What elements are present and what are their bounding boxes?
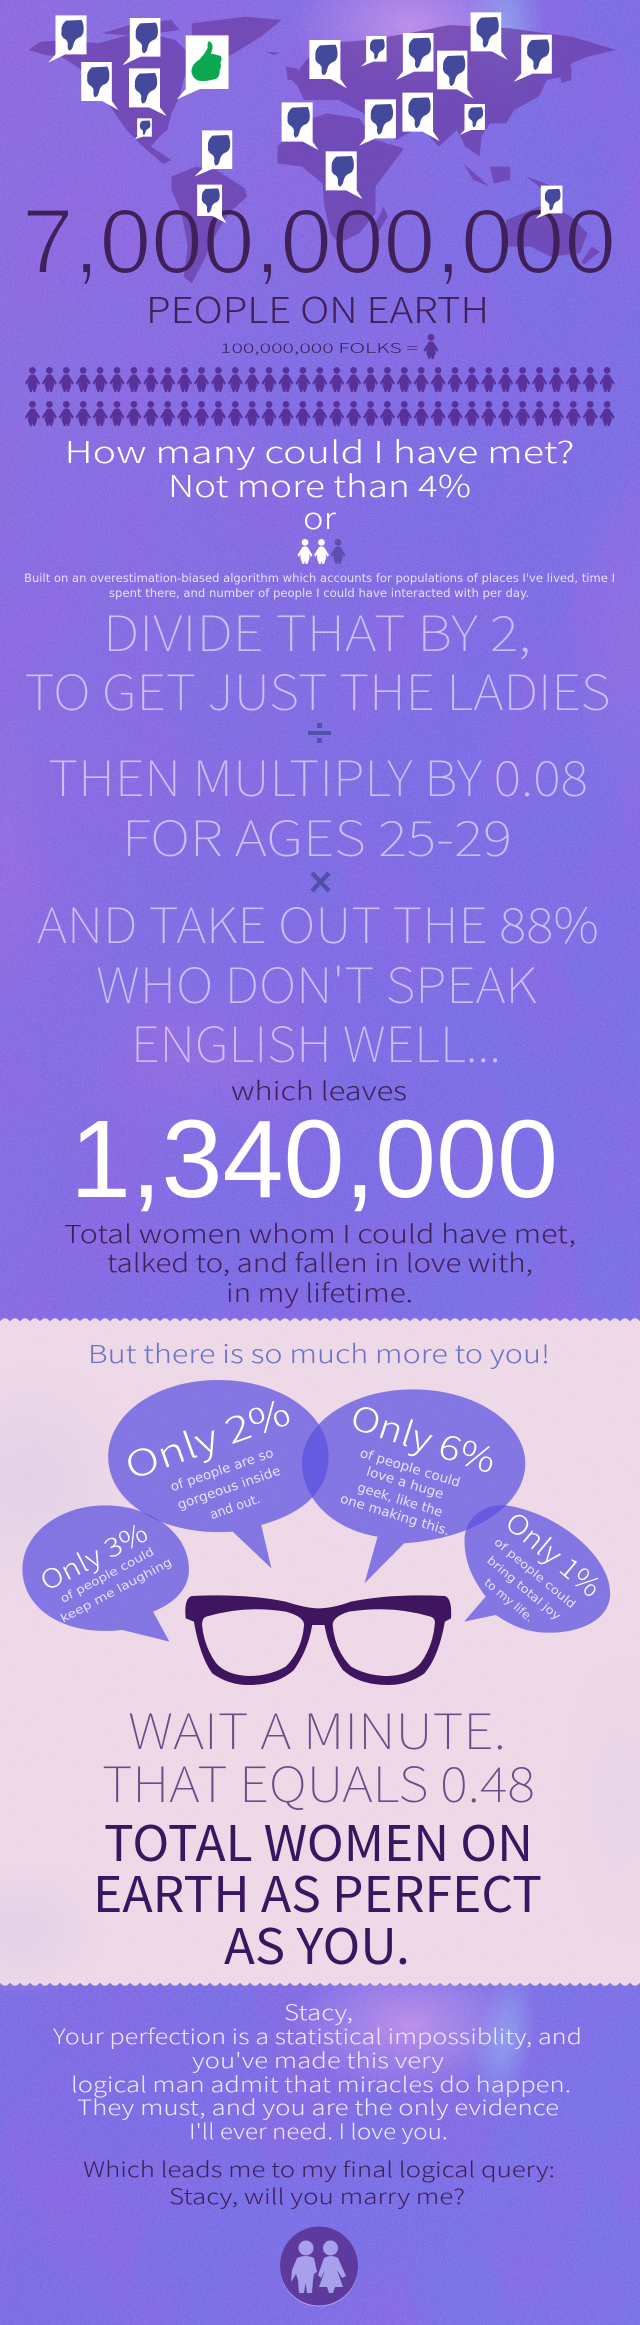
bubble text: only 1%: bring total joy (484, 1553, 564, 1623)
legend: 100,000,000 folks: 100,000,000 FOLKS = (220, 337, 418, 357)
paper heading: But there is so much more to you! (88, 1335, 550, 1371)
final question: Which leads me to my final logical query: (83, 2154, 555, 2184)
pictogram: 70 people rows (25, 367, 615, 426)
thin steps text: AND TAKE OUT THE 88% (37, 887, 599, 958)
bubble text: only 1% (482, 1502, 611, 1625)
question heading: Not more than 4% (168, 462, 471, 506)
wait a minute text: THAT EQUALS 0.48 (102, 1746, 535, 1817)
bubble text: only 2%: gorgeous inside (176, 1464, 283, 1513)
question heading (64, 428, 574, 538)
perfect headline: EARTH AS PERFECT (93, 1856, 542, 1927)
perfect headline: AS YOU. (224, 1908, 410, 1979)
bubble text: only 2%: Only 2% (117, 1384, 297, 1490)
icon: couple in circle (280, 2226, 358, 2306)
icon: glasses (185, 1595, 451, 1685)
footnote text: Built on an overestimation-biased algorithm which accounts for populations of places I've lived, time I (24, 571, 615, 585)
bubble text: only 6%: one making this. (338, 1492, 452, 1539)
bubble text: only 3%: Only 3% (33, 1513, 153, 1598)
love letter text: logical man admit that miracles do happen. (71, 2069, 571, 2099)
question heading: or (303, 494, 336, 538)
which leaves: which leaves (231, 1072, 407, 1108)
thin steps text (24, 595, 610, 1077)
thin steps text: TO GET JUST THE LADIES (24, 654, 610, 725)
bubble text: only 6% (338, 1390, 503, 1539)
perfect headline: TOTAL WOMEN ON (104, 1805, 533, 1876)
wait a minute text (102, 1693, 535, 1817)
big number: 7,000,000,000 (22, 191, 616, 293)
bubble text: only 1%: of people could (491, 1535, 579, 1611)
icon: three people (298, 539, 346, 564)
bubble text: only 2%: of people are so (169, 1446, 276, 1495)
bubble text: only 1%: Only 1% (498, 1502, 611, 1605)
icon: green thumbs up bubble (177, 35, 229, 99)
bubble text: only 3% (33, 1513, 174, 1625)
thin steps text: FOR AGES 25-29 (122, 800, 512, 871)
bubble text: only 6%: Only 6% (345, 1390, 503, 1483)
thin steps text: DIVIDE THAT BY 2, (103, 595, 531, 666)
thin steps text: THEN MULTIPLY BY 0.08 (48, 740, 588, 811)
subtitle: people on earth: PEOPLE ON EARTH (146, 282, 489, 334)
final question (83, 2154, 555, 2211)
perfect headline (93, 1805, 542, 1979)
thin steps text: WHO DON'T SPEAK (96, 947, 537, 1018)
bubble text: only 2%: and out. (208, 1492, 262, 1523)
thin steps text: ENGLISH WELL... (131, 1006, 501, 1077)
bubble text: only 1%: to my life. (482, 1575, 536, 1625)
result number: 1,340,000 (70, 1098, 558, 1221)
love letter text (53, 1997, 582, 2146)
result description: talked to, and fallen in love with, (107, 1244, 533, 1280)
question heading: How many could I have met? (64, 428, 574, 472)
panel: paper section (0, 1315, 640, 2000)
love letter text: Stacy, (284, 1997, 353, 2027)
speech bubbles shapes (22, 1380, 610, 1642)
result description: Total women whom I could have met, (64, 1215, 576, 1251)
icon: multiply sign (312, 873, 329, 891)
love letter text: you've made this very (192, 2045, 444, 2075)
final question: Stacy, will you marry me? (169, 2181, 465, 2211)
bubble text: only 6%: love a huge (364, 1465, 445, 1502)
icon: divide sign (308, 723, 331, 743)
love letter text: Your perfection is a statistical impossiblity, and (53, 2021, 582, 2051)
love letter text: I'll ever need. I love you. (189, 2116, 448, 2146)
bubble text: only 6%: geek, like the (356, 1480, 444, 1521)
love letter text: They must, and you are the only evidence (77, 2092, 559, 2122)
wait a minute text: WAIT A MINUTE. (128, 1693, 506, 1764)
bubble text: only 6%: of people could (358, 1446, 462, 1491)
world map (29, 17, 616, 283)
bubble text: only 3%: of people could (58, 1544, 156, 1606)
bubble text: only 2% (117, 1384, 297, 1523)
location speech bubbles (48, 12, 562, 223)
footnote text: spent there, and number of people I could have interacted with per day. (109, 586, 529, 600)
result description (64, 1215, 576, 1310)
legend: 100,000,000 folks (220, 334, 438, 359)
result description: in my lifetime. (226, 1274, 413, 1310)
footnote text (24, 571, 615, 600)
bubble text: only 3%: keep me laughing (58, 1555, 174, 1625)
